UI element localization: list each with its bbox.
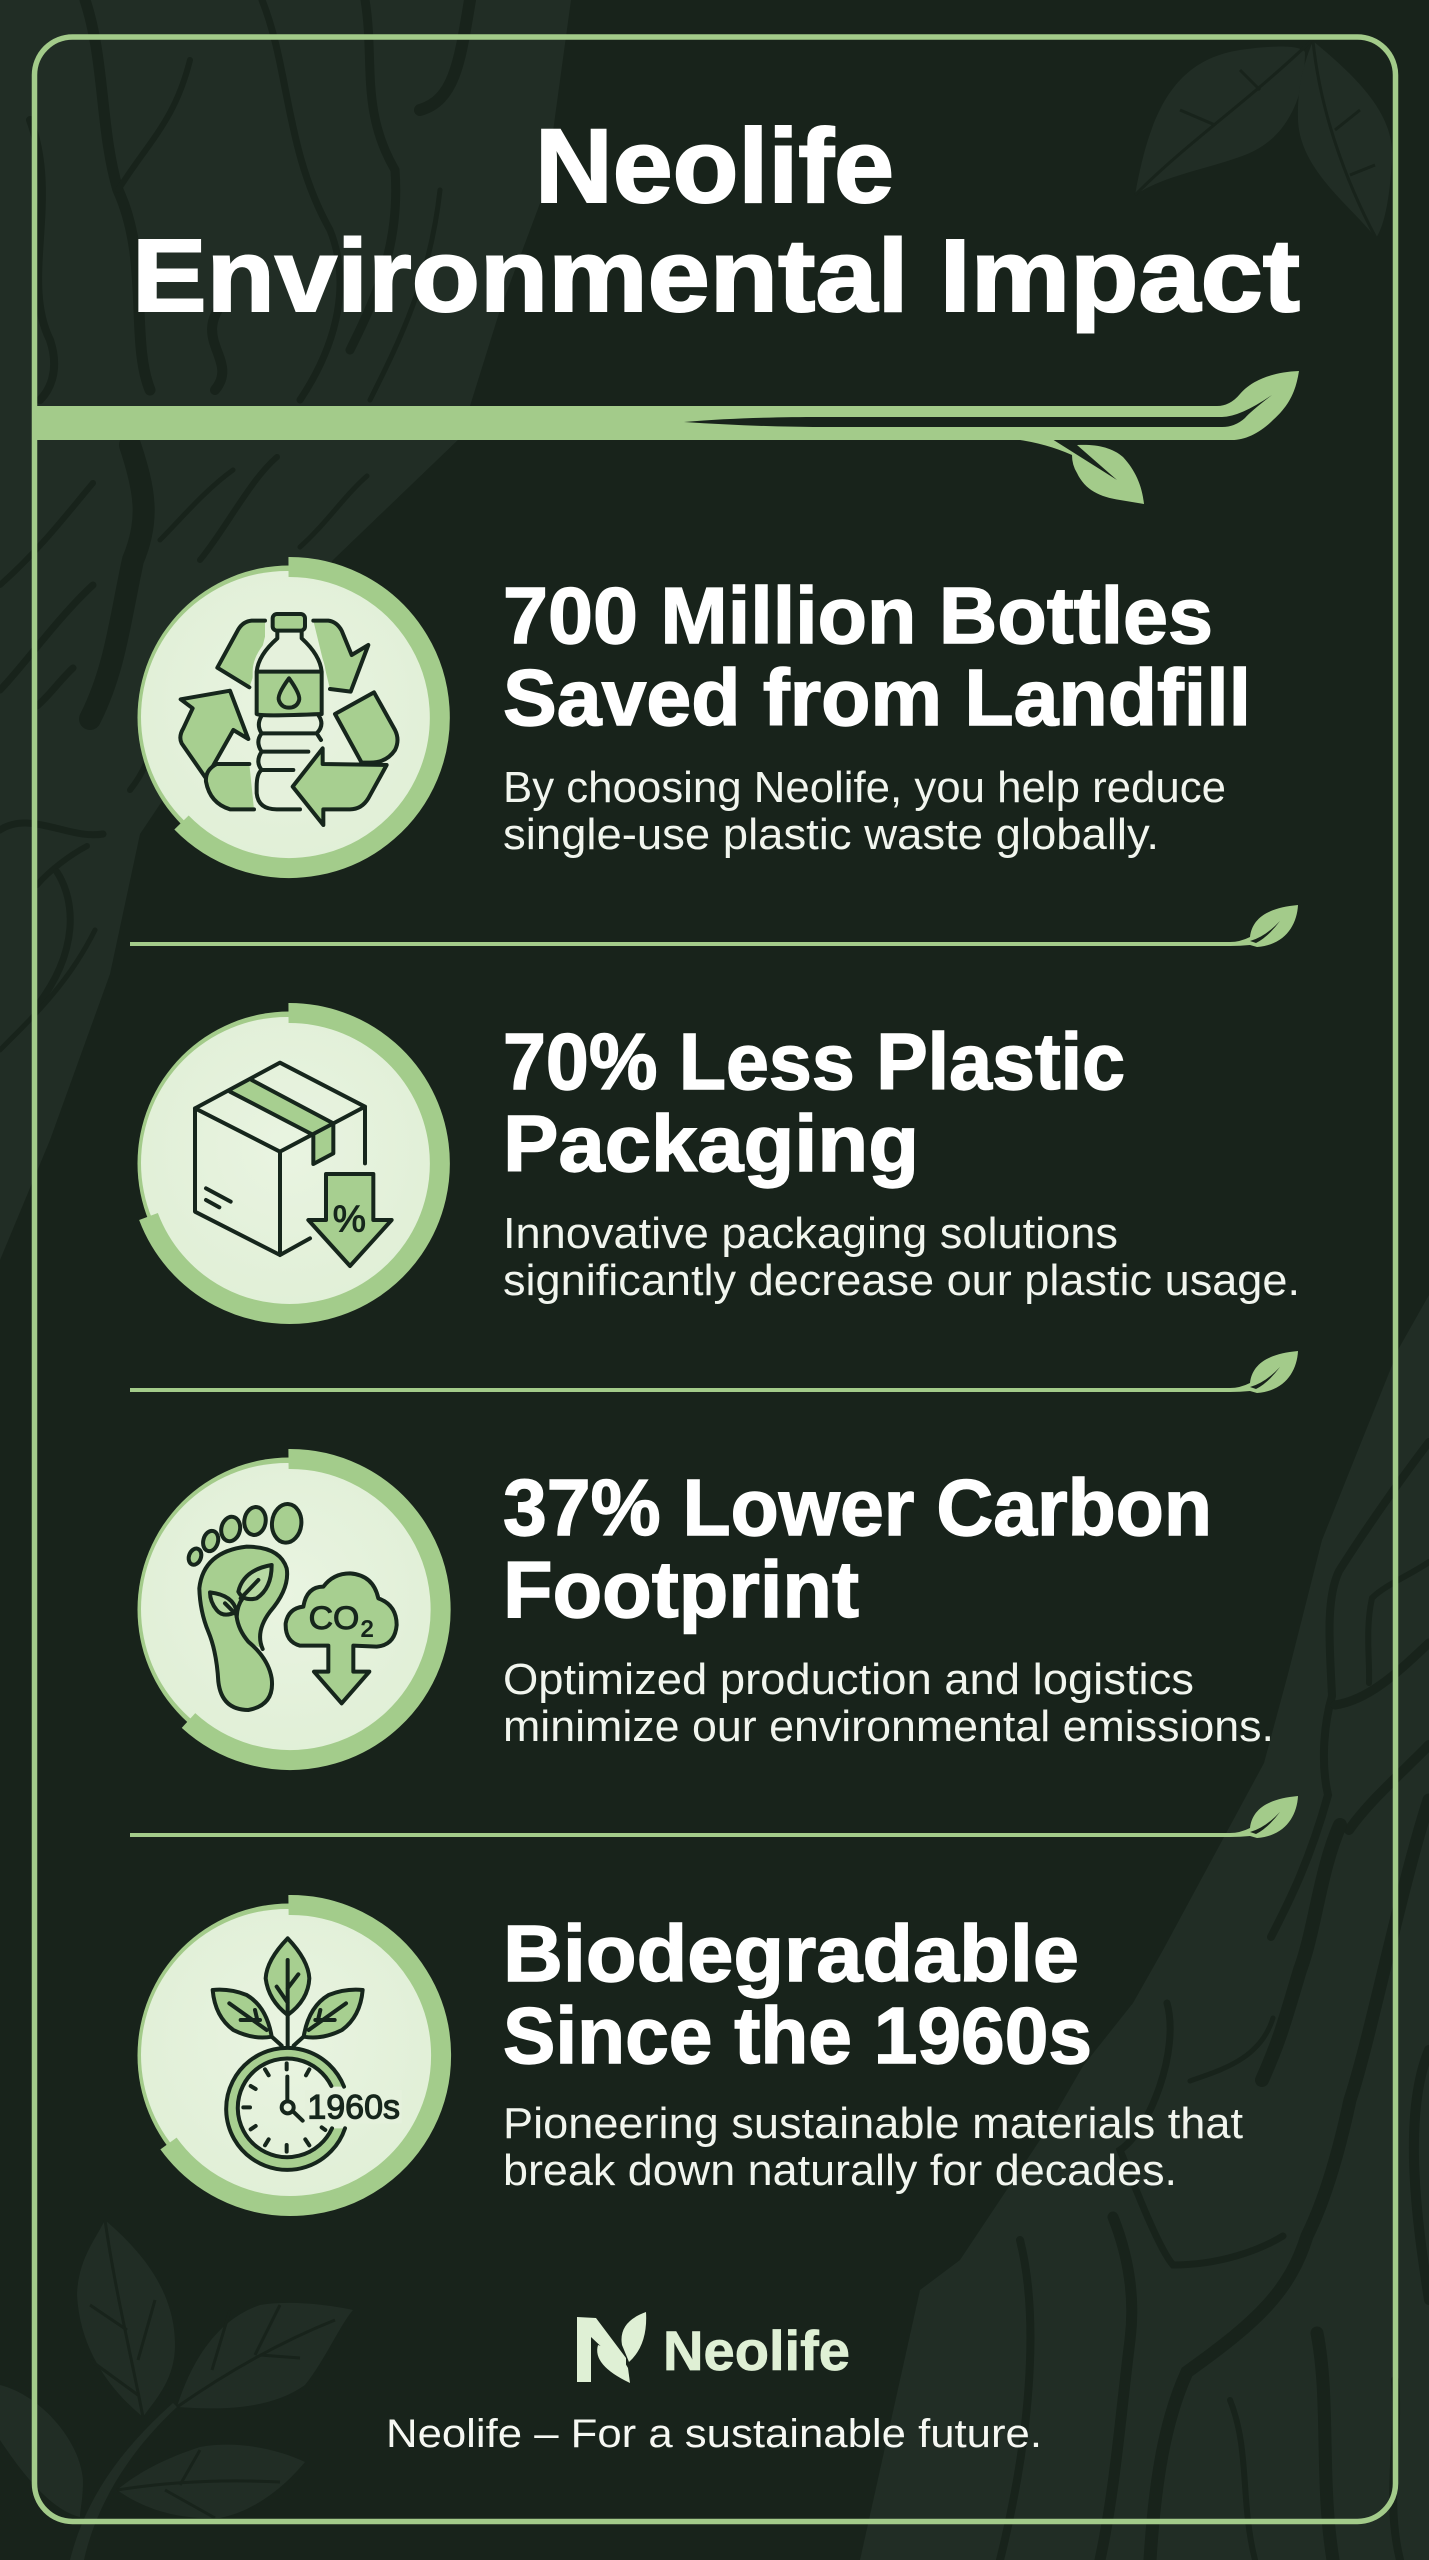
title: Neolife bbox=[535, 108, 894, 225]
footer logo: Neolife bbox=[663, 2319, 850, 2382]
description: Innovative packaging solutions bbox=[503, 1209, 1118, 1258]
background: leaves top right bbox=[1135, 40, 1392, 238]
heading: Biodegradable bbox=[503, 1909, 1079, 1998]
icon: bottle and recycling arrows bbox=[138, 566, 442, 870]
background: bark texture bottom right bbox=[860, 1295, 1429, 2560]
heading: 70% Less Plastic bbox=[503, 1017, 1125, 1106]
icon: N leaf mark bbox=[577, 2312, 646, 2383]
heading bbox=[503, 1017, 1125, 1188]
icon: footprint and CO2 cloud bbox=[138, 1458, 442, 1762]
icon: sprout and clock: 1960s bbox=[307, 2089, 400, 2127]
heading: Saved from Landfill bbox=[503, 653, 1251, 742]
footer tagline: Neolife – For a sustainable future. bbox=[386, 2412, 1042, 2456]
heading bbox=[503, 1909, 1092, 2080]
description: break down naturally for decades. bbox=[503, 2146, 1177, 2195]
item 3: carbon footprint bbox=[138, 1458, 1274, 1762]
item 4: biodegradable bbox=[138, 1904, 1243, 2208]
footer logo bbox=[577, 2312, 850, 2383]
description bbox=[503, 1655, 1274, 1751]
icon: sprout and clock bbox=[138, 1904, 442, 2208]
description: By choosing Neolife, you help reduce bbox=[503, 763, 1226, 812]
icon: footprint and CO2 cloud: CO bbox=[309, 1599, 359, 1636]
icon: box with percent arrow: % bbox=[333, 1197, 366, 1239]
item 2: plastic packaging bbox=[138, 1012, 1300, 1316]
divider leaf 1 bbox=[130, 905, 1298, 947]
title branch divider with leaves bbox=[33, 371, 1299, 504]
heading: Since the 1960s bbox=[503, 1991, 1092, 2080]
heading: Footprint bbox=[503, 1545, 859, 1634]
heading: 700 Million Bottles bbox=[503, 571, 1213, 660]
heading bbox=[503, 1463, 1212, 1634]
heading: Packaging bbox=[503, 1099, 919, 1188]
heading: 37% Lower Carbon bbox=[503, 1463, 1212, 1552]
divider leaf 3 bbox=[130, 1796, 1298, 1838]
description bbox=[503, 763, 1226, 859]
description: single-use plastic waste globally. bbox=[503, 810, 1159, 859]
description: Pioneering sustainable materials that bbox=[503, 2099, 1243, 2148]
background: bark texture top left bbox=[0, 0, 571, 1260]
description bbox=[503, 1209, 1300, 1305]
icon: footprint and CO2 cloud: 2 bbox=[361, 1615, 374, 1641]
heading bbox=[503, 571, 1251, 742]
title: Environmental Impact bbox=[132, 218, 1300, 333]
description: Optimized production and logistics bbox=[503, 1655, 1194, 1704]
background: leaves bottom left bbox=[0, 2220, 353, 2560]
description bbox=[503, 2099, 1243, 2195]
title bbox=[132, 108, 1300, 333]
divider leaf 2 bbox=[130, 1351, 1298, 1393]
description: significantly decrease our plastic usage. bbox=[503, 1256, 1300, 1305]
description: minimize our environmental emissions. bbox=[503, 1702, 1274, 1751]
item 1: landfill bottles bbox=[138, 566, 1251, 870]
icon: box with percent arrow bbox=[138, 1012, 442, 1316]
